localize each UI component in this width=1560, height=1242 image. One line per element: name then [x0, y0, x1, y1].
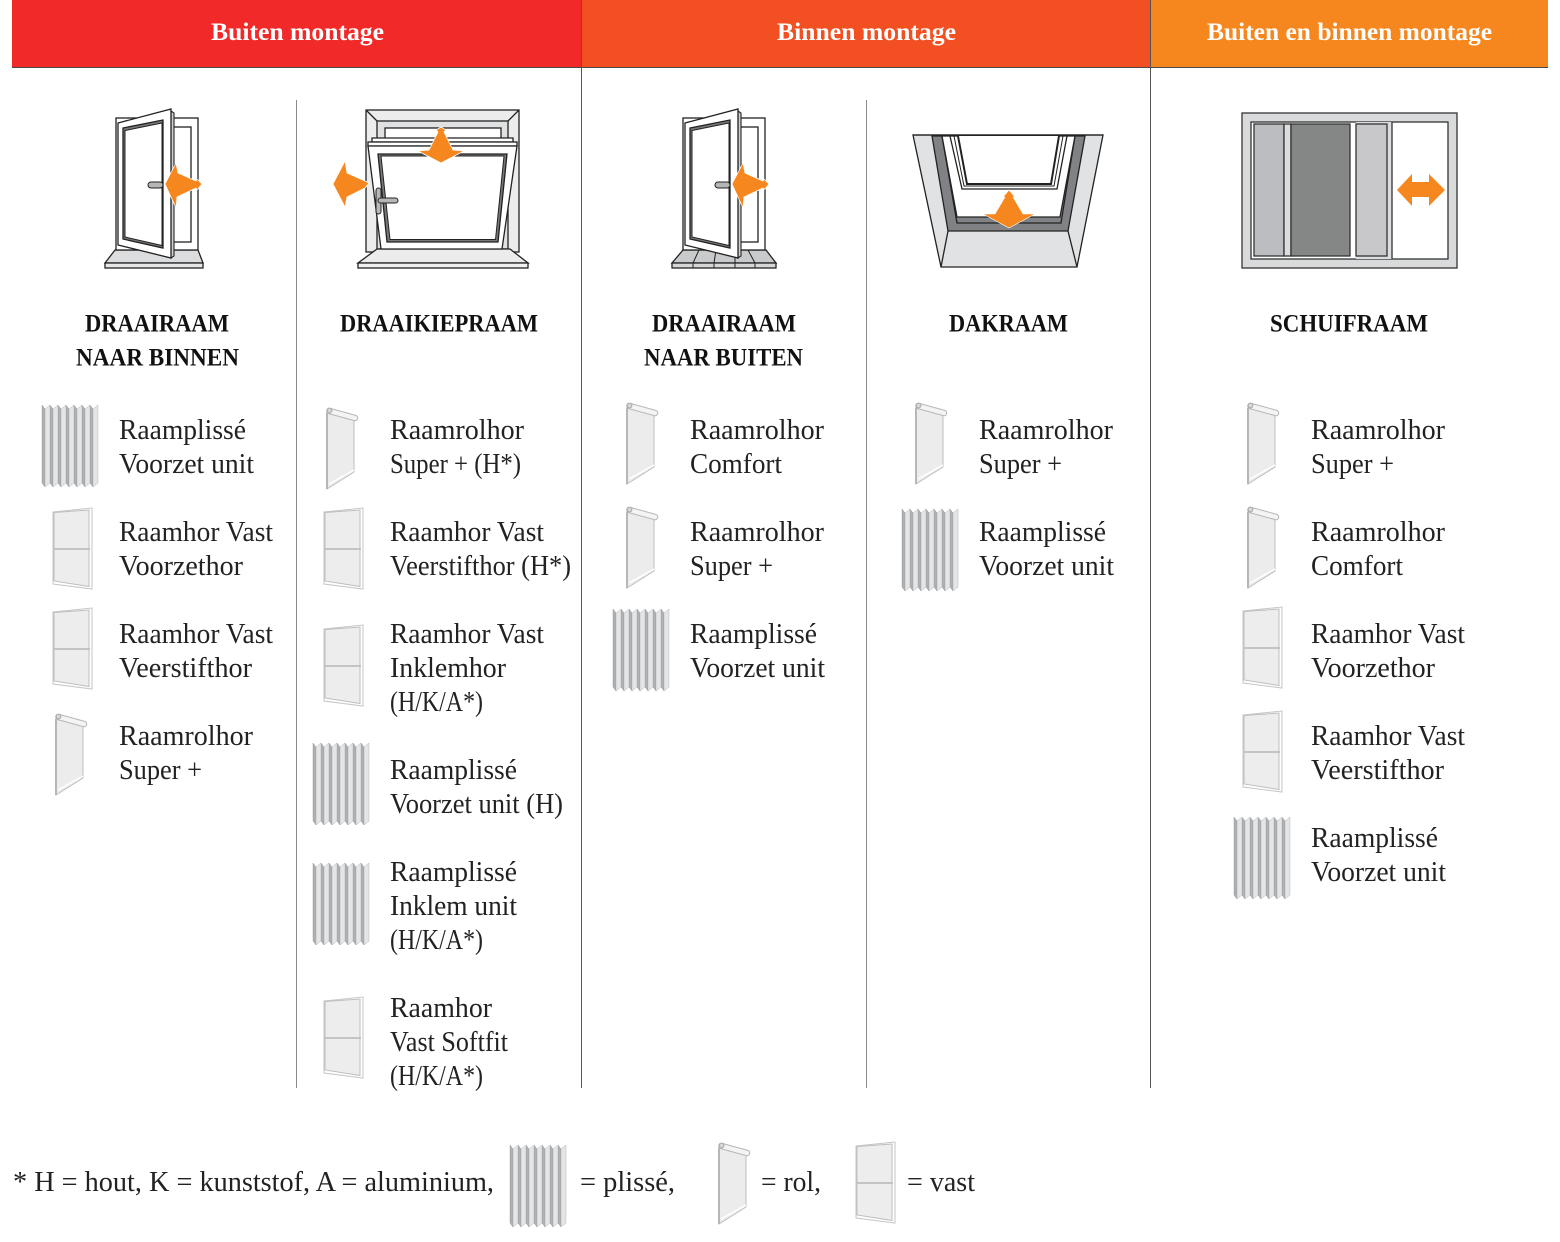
panel: dakraam	[902, 135, 1114, 591]
item: Raamhor Vast Voorzethor	[1243, 607, 1465, 688]
item: Raamplissé Inklem unit (H/K/A*)	[313, 857, 517, 956]
item: Raamrolhor Super +: Super +	[690, 551, 773, 582]
item: Raamhor Vast Inklemhor (H/K/A*): (H/K/A*)	[390, 687, 483, 718]
item: Raamhor Vast Veerstifthor (H*)	[324, 508, 571, 589]
item: Raamplissé Voorzet unit (H): Voorzet unit (H)	[390, 789, 563, 820]
legend note: * H = hout, K = kunststof, A = aluminium,	[13, 1167, 494, 1198]
header: Buiten en binnen montage: Buiten en binnen montage	[1207, 19, 1492, 46]
heading: DRAAIRAAM	[652, 310, 796, 338]
item: Raamhor Vast Veerstifthor: Veerstifthor	[119, 653, 253, 684]
item: Raamhor Vast Voorzethor: Raamhor Vast	[1311, 619, 1465, 650]
item: Raamhor Vast Softfit (H/K/A*): (H/K/A*)	[390, 1061, 483, 1092]
item: Raamplissé Voorzet unit (H)	[313, 743, 563, 825]
heading: NAAR BINNEN	[76, 344, 239, 372]
item: Raamplissé Voorzet unit: Raamplissé	[979, 517, 1106, 548]
item: Raamrolhor Super +	[1248, 403, 1446, 484]
legend: plissé: = plissé,	[580, 1167, 675, 1198]
legend: vast	[856, 1142, 975, 1223]
item: Raamhor Vast Veerstifthor (H*): Veerstifthor (H*)	[390, 551, 571, 582]
heading: DAKRAAM	[949, 310, 1068, 338]
item: Raamrolhor Super +	[916, 403, 1114, 484]
item: Raamrolhor Super +: Super +	[979, 449, 1062, 480]
header: Buiten montage	[12, 0, 582, 67]
item: Raamhor Vast Voorzethor: Voorzethor	[1311, 653, 1436, 684]
item: Raamrolhor Super + (H*)	[327, 408, 525, 489]
icon: dakraam	[913, 135, 1103, 267]
item: Raamrolhor Super + (H*): Super + (H*)	[390, 449, 521, 480]
heading: DRAAIKIEPRAAM	[340, 310, 538, 338]
icon: schuifraam	[1242, 113, 1457, 268]
item: Raamhor Vast Veerstifthor	[53, 608, 273, 689]
item: Raamrolhor Comfort: Comfort	[690, 449, 782, 480]
header: Buiten en binnen montage	[1151, 0, 1548, 67]
legend: plissé	[510, 1145, 675, 1227]
item: Raamplissé Voorzet unit: Raamplissé	[690, 619, 817, 650]
item: Raamrolhor Super +	[56, 714, 254, 795]
legend: rol: = rol,	[761, 1167, 821, 1198]
item: Raamrolhor Super +: Super +	[1311, 449, 1394, 480]
item: Raamhor Vast Voorzethor: Raamhor Vast	[119, 517, 273, 548]
item: Raamrolhor Super +	[627, 507, 825, 588]
item: Raamrolhor Super +: Raamrolhor	[119, 721, 254, 752]
item: Raamplissé Voorzet unit: Voorzet unit	[119, 449, 254, 480]
heading: NAAR BUITEN	[644, 344, 803, 372]
item: Raamhor Vast Veerstifthor (H*): Raamhor Vast	[390, 517, 544, 548]
heading: SCHUIFRAAM	[1270, 310, 1428, 338]
item: Raamplissé Inklem unit (H/K/A*): Raamplissé	[390, 857, 517, 888]
item: Raamplissé Inklem unit (H/K/A*): (H/K/A*)	[390, 925, 483, 956]
item: Raamplissé Voorzet unit: Voorzet unit	[979, 551, 1114, 582]
item: Raamrolhor Comfort: Raamrolhor	[690, 415, 825, 446]
item: Raamhor Vast Veerstifthor: Raamhor Vast	[119, 619, 273, 650]
heading	[644, 310, 803, 372]
legend: vast: = vast	[907, 1167, 975, 1198]
item: Raamplissé Voorzet unit: Voorzet unit	[690, 653, 825, 684]
item: Raamhor Vast Inklemhor (H/K/A*): Inklemhor	[390, 653, 507, 684]
item: Raamrolhor Super +: Super +	[119, 755, 202, 786]
icon: draairaam naar binnen	[105, 109, 203, 268]
item: Raamplissé Voorzet unit: Voorzet unit	[1311, 857, 1446, 888]
item: Raamrolhor Super +: Raamrolhor	[979, 415, 1114, 446]
panel: draairaam naar buiten	[613, 109, 825, 691]
icon: draaikiepraam	[333, 110, 528, 268]
item: Raamplissé Voorzet unit (H): Raamplissé	[390, 755, 517, 786]
item: Raamrolhor Comfort	[627, 403, 825, 484]
item: Raamrolhor Super + (H*): Raamrolhor	[390, 415, 525, 446]
item: Raamhor Vast Softfit (H/K/A*): Vast Softfit	[390, 1027, 508, 1058]
item: Raamplissé Voorzet unit: Raamplissé	[119, 415, 246, 446]
item: Raamrolhor Comfort: Comfort	[1311, 551, 1403, 582]
item: Raamplissé Voorzet unit	[42, 405, 254, 487]
header: Buiten montage: Buiten montage	[211, 19, 384, 46]
item: Raamrolhor Super +: Raamrolhor	[1311, 415, 1446, 446]
heading: DRAAIRAAM	[85, 310, 229, 338]
panel: draaikiepraam	[313, 110, 571, 1092]
header: Binnen montage: Binnen montage	[777, 19, 956, 46]
item: Raamrolhor Comfort: Raamrolhor	[1311, 517, 1446, 548]
item: Raamhor Vast Voorzethor: Voorzethor	[119, 551, 244, 582]
item: Raamplissé Voorzet unit	[1234, 817, 1446, 899]
item: Raamplissé Voorzet unit: Raamplissé	[1311, 823, 1438, 854]
header: Binnen montage	[582, 0, 1151, 67]
item: Raamhor Vast Veerstifthor	[1243, 711, 1465, 792]
item: Raamplissé Inklem unit (H/K/A*): Inklem unit	[390, 891, 517, 922]
legend: rol	[719, 1143, 821, 1224]
heading	[76, 310, 239, 372]
item: Raamplissé Voorzet unit	[613, 609, 825, 691]
item: Raamhor Vast Veerstifthor: Veerstifthor	[1311, 755, 1445, 786]
item: Raamhor Vast Inklemhor (H/K/A*): Raamhor Vast	[390, 619, 544, 650]
item: Raamrolhor Super +: Raamrolhor	[690, 517, 825, 548]
item: Raamhor Vast Voorzethor	[53, 508, 273, 589]
panel: draairaam naar binnen	[42, 109, 273, 795]
icon: draairaam naar buiten	[672, 109, 776, 268]
legend	[13, 1142, 975, 1227]
panel: schuifraam	[1234, 113, 1465, 899]
item: Raamrolhor Comfort	[1248, 507, 1446, 588]
item: Raamhor Vast Inklemhor (H/K/A*)	[324, 619, 544, 718]
item: Raamhor Vast Softfit (H/K/A*)	[324, 993, 508, 1092]
item: Raamhor Vast Softfit (H/K/A*): Raamhor	[390, 993, 493, 1024]
item: Raamplissé Voorzet unit	[902, 509, 1114, 591]
item: Raamhor Vast Veerstifthor: Raamhor Vast	[1311, 721, 1465, 752]
